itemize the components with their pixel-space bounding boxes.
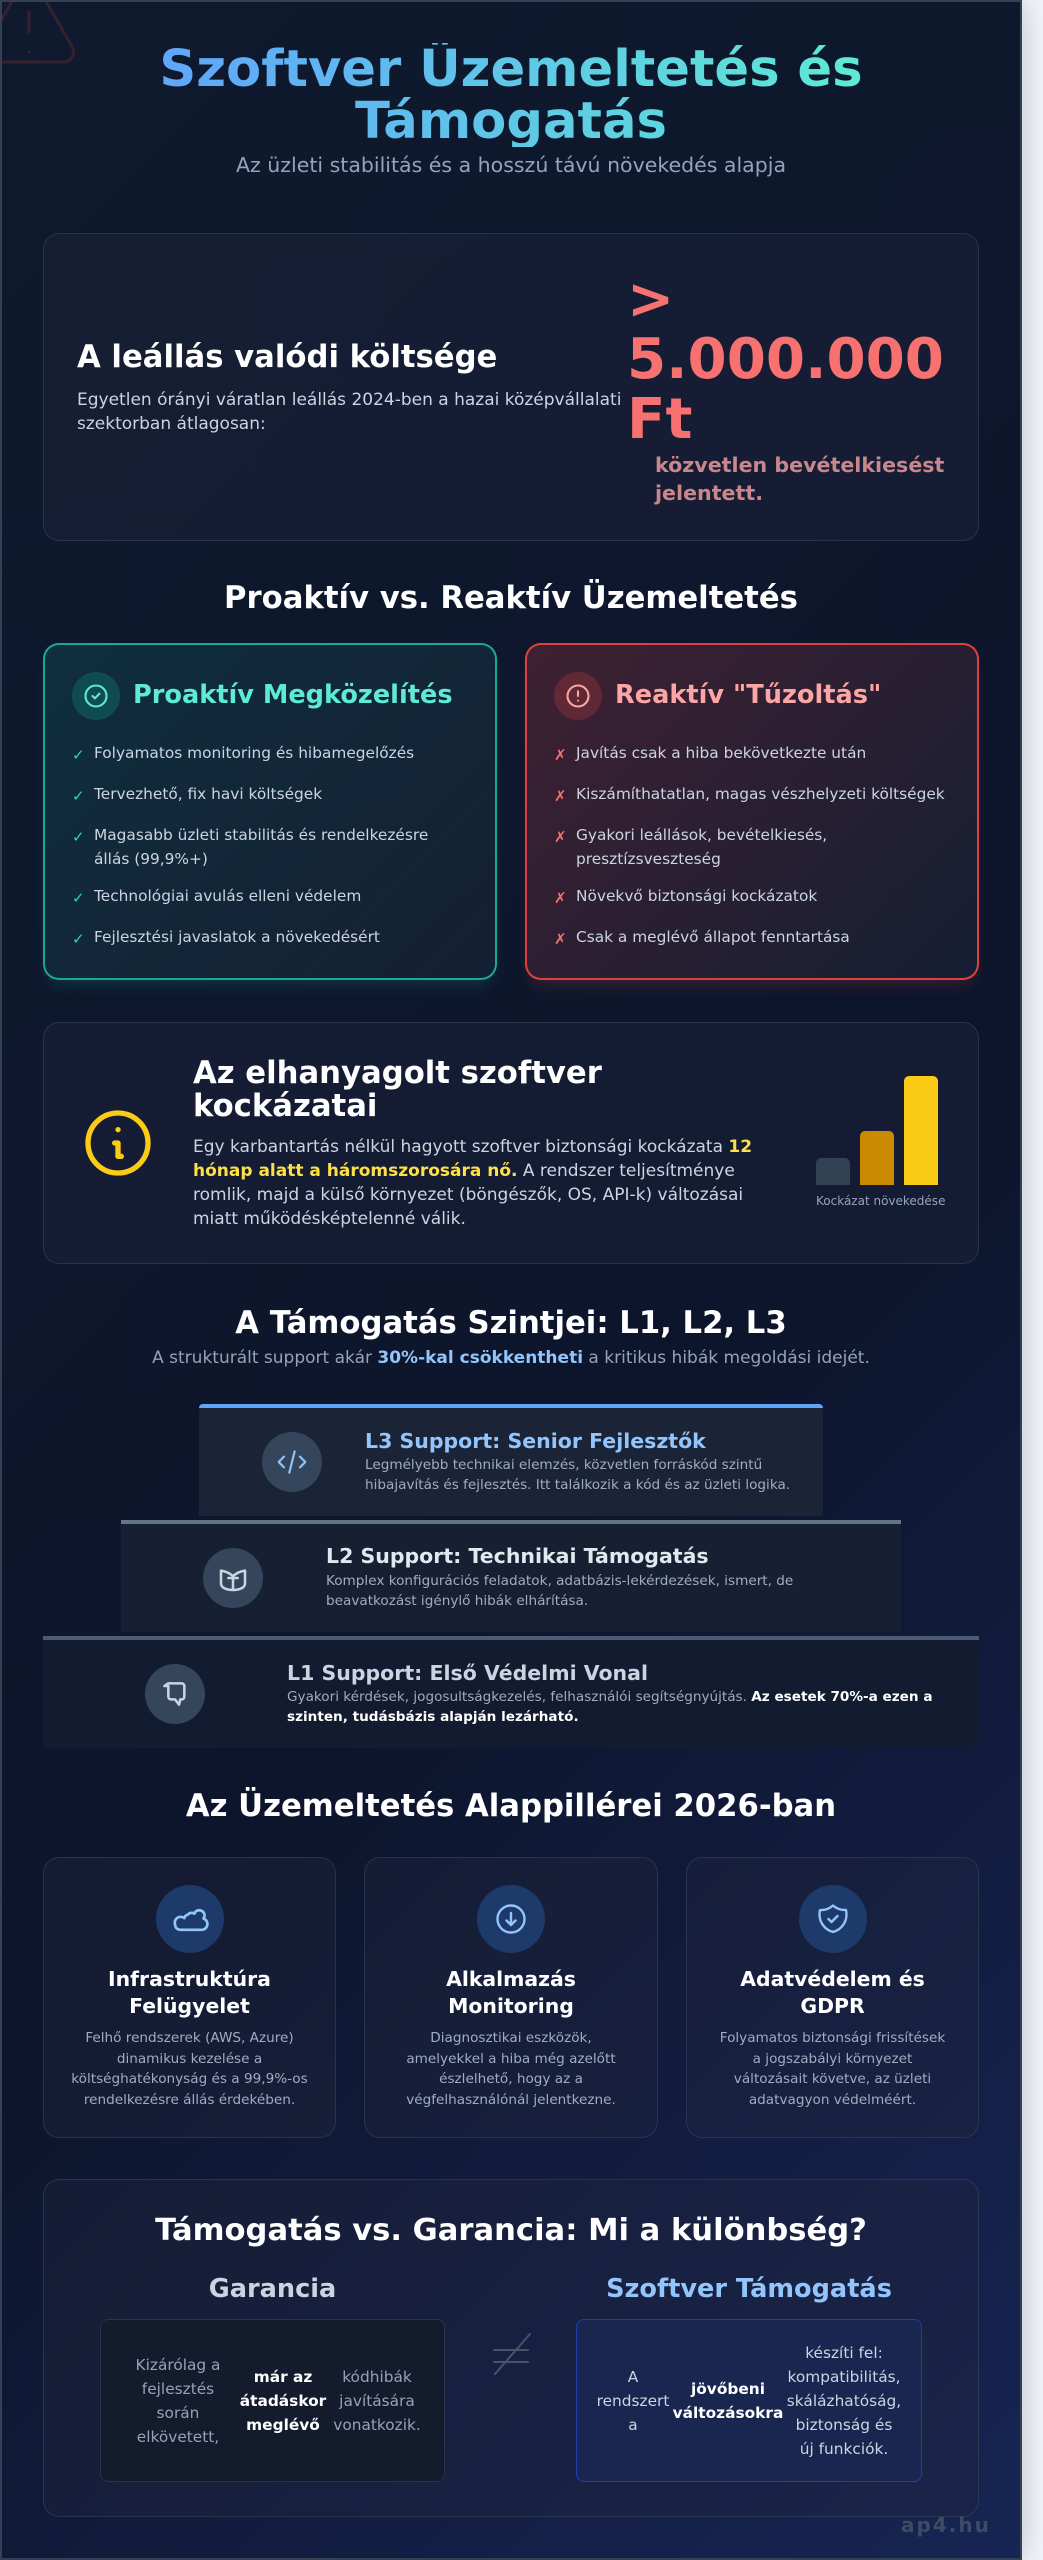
reactive list: ✗ [554,930,567,948]
icon: shield check [799,1885,867,1953]
number caption: közvetlen bevételkiesést [655,453,944,477]
support box: készíti fel: [805,2344,883,2362]
level L3 [199,1404,823,1516]
reactive list [554,744,945,948]
warranty box [100,2319,445,2482]
L2 description: beavatkozást igénylő hibák elhárítása. [326,1593,588,1609]
monitoring description: Diagnosztikai eszközök, [430,2030,592,2046]
icon: chat [145,1664,205,1724]
support box: A [628,2368,638,2386]
risk description: hónap alatt a háromszorosára nő. A rendszer teljesítménye [193,1161,735,1181]
infrastructure description: dinamikus kezelése a [117,2050,262,2066]
watermark: ap4.hu [901,2513,991,2537]
panel description: szektorban átlagosan: [77,414,266,434]
proactive list: Fejlesztési javaslatok a növekedésért [94,928,380,946]
panel description [77,390,621,434]
icon: code [262,1432,322,1492]
bar: high [904,1076,938,1185]
infrastructure description: rendelkezésre állás érdekében. [84,2092,295,2108]
icon: yellow info [85,1110,151,1176]
big number [627,267,944,452]
reactive list: Növekvő biztonsági kockázatok [576,887,817,905]
panel: reactive firefighting [525,643,979,980]
big number: Ft [627,387,692,452]
reactive list: ✗ [554,746,567,764]
chart caption: Kockázat növekedése [816,1194,945,1208]
panel: proactive approach [43,643,497,980]
data protection description: változásait követve, az üzleti [734,2071,931,2087]
proactive list: Tervezhető, fix havi költségek [94,785,322,803]
proactive list: ✓ [72,889,85,907]
section subtitle: A strukturált support akár 30%-kal csökkentheti a kritikus hibák megoldási idejét. [152,1348,870,1368]
reactive list: ✗ [554,828,567,846]
support box: a [628,2416,638,2434]
warranty box: már az [254,2368,312,2386]
panel: infrastructure pillar [43,1857,336,2138]
risk description: Egy karbantartás nélkül hagyott szoftver biztonsági kockázata 12 [193,1137,752,1157]
icon: arrow down circle [477,1885,545,1953]
proactive list: Magasabb üzleti stabilitás és rendelkezésre [94,826,428,844]
proactive list: Technológiai avulás elleni védelem [94,887,361,905]
reactive list: Kiszámíthatatlan, magas vészhelyzeti költségek [576,785,945,803]
monitoring heading [446,1967,576,2018]
proactive list: Folyamatos monitoring és hibamegelőzés [94,744,414,762]
L2 description [326,1573,793,1609]
reactive list: presztízsveszteség [576,850,721,868]
monitoring description: észlelhető, hogy az a [439,2071,583,2087]
L2 description: Komplex konfigurációs feladatok, adatbázis-lekérdezések, ismert, de [326,1573,793,1589]
data protection heading: GDPR [800,1994,865,2018]
support box: kompatibilitás, [787,2368,901,2386]
infrastructure description [71,2030,308,2108]
panel: application monitoring pillar [364,1857,658,2138]
section heading: pillars: Az Üzemeltetés Alappillérei 2026-ban [186,1789,836,1824]
panel: risks of neglected software [43,1022,979,1264]
big number: 5.000.000 [627,327,944,392]
infrastructure description: Felhő rendszerek (AWS, Azure) [85,2030,294,2046]
proactive list: ✓ [72,930,85,948]
level L2 [121,1520,901,1632]
icon: exclamation circle [554,672,602,720]
L3 description: hibajavítás és fejlesztés. Itt találkozik a kód és az üzleti logika. [365,1477,790,1493]
support box: jövőbeni [691,2380,765,2398]
infrastructure heading: Infrastruktúra [108,1967,271,1991]
panel: data protection pillar [686,1857,979,2138]
reactive heading: Reaktív "Tűzoltás" [615,680,881,710]
icon: cloud [156,1885,224,1953]
warranty box: vonatkozik. [333,2416,421,2434]
title: Támogatás [355,91,667,151]
title [157,43,865,147]
infrastructure heading: Felügyelet [129,1994,250,2018]
L3 description [365,1457,790,1493]
L1 description: szinten, tudásbázis alapján lezárható. [287,1709,579,1725]
warranty box: Kizárólag a [136,2356,220,2374]
proactive heading: Proaktív Megközelítés [133,680,453,710]
panel: support vs warranty [43,2179,979,2517]
number caption [654,453,944,505]
warranty box: meglévő [246,2416,320,2434]
monitoring description: amelyekkel a hiba még azelőtt [406,2050,616,2066]
risk description: miatt működésképtelenné válik. [193,1209,466,1229]
support box [576,2319,922,2482]
warranty box: során [157,2404,199,2422]
bar: low [816,1158,850,1185]
data protection description: adatvagyon védelméért. [749,2092,916,2108]
support heading: Szoftver Támogatás [606,2274,892,2304]
monitoring description [406,2030,616,2108]
reactive list: ✗ [554,889,567,907]
infrastructure heading [108,1967,271,2018]
monitoring heading: Monitoring [448,1994,574,2018]
support box: skálázhatóság, [787,2392,901,2410]
risk description [193,1137,752,1229]
data protection description: Folyamatos biztonsági frissítések [720,2030,945,2046]
support box: rendszert [597,2392,669,2410]
reactive list: Csak a meglévő állapot fenntartása [576,928,850,946]
reactive list: Javítás csak a hiba bekövetkezte után [576,744,866,762]
bar: medium [860,1131,894,1185]
data protection description [720,2030,946,2108]
warranty box: elkövetett, [137,2428,219,2446]
subtitle: Az üzleti stabilitás és a hosszú távú növekedés alapja [236,153,786,177]
icon: check circle [72,672,120,720]
support box: biztonság és [796,2416,892,2434]
proactive list: állás (99,9%+) [94,850,208,868]
risk heading: kockázatai [193,1089,377,1124]
monitoring description: végfelhasználónál jelentkezne. [406,2092,616,2108]
warranty box: javítására [339,2392,415,2410]
data protection description: a jogszabályi környezet [753,2050,912,2066]
risk heading: Az elhanyagolt szoftver [193,1056,602,1091]
support box: változásokra [673,2404,783,2422]
L2 heading: L2 Support: Technikai Támogatás [326,1544,709,1568]
L1 heading: L1 Support: Első Védelmi Vonal [287,1661,648,1685]
infrastructure description: költséghatékonyság és a 99,9%-os [71,2071,308,2087]
proactive list [72,744,428,948]
reactive list: Gyakori leállások, bevételkiesés, [576,826,827,844]
warranty box: kódhibák [342,2368,412,2386]
monitoring heading: Alkalmazás [446,1967,576,1991]
L3 description: Legmélyebb technikai elemzés, közvetlen forráskód szintű [365,1457,762,1473]
proactive list: ✓ [72,787,85,805]
warranty box: átadáskor [240,2392,326,2410]
L1 description [287,1689,932,1725]
proactive list: ✓ [72,828,85,846]
icon: book [203,1548,263,1608]
reactive list: ✗ [554,787,567,805]
warranty box: fejlesztés [142,2380,214,2398]
panel description: Egyetlen órányi váratlan leállás 2024-ben a hazai középvállalati [77,390,621,410]
decorative warning triangle icon [2,2,76,64]
risk description: romlik, majd a külső környezet (böngészők, OS, API-k) változásai [193,1185,743,1205]
big number: > [627,267,674,332]
L1 description: Gyakori kérdések, jogosultságkezelés, felhasználói segítségnyújtás. Az esetek 70%-a ezen a [287,1689,932,1705]
L3 heading: L3 Support: Senior Fejlesztők [365,1429,706,1453]
risk heading [193,1056,602,1124]
panel heading: A leállás valódi költsége [77,340,497,375]
panel: cost of downtime [43,233,979,541]
number caption: jelentett. [655,481,763,505]
comparison heading: Támogatás vs. Garancia: Mi a különbség? [155,2213,867,2248]
level L1 [43,1636,979,1748]
data protection heading [740,1967,925,2018]
data protection heading: Adatvédelem és [740,1967,925,1991]
support box: új funkciók. [800,2440,888,2458]
proactive list: ✓ [72,746,85,764]
chart: risk growth bars [816,1076,945,1208]
section heading: proactive vs reactive: Proaktív vs. Reaktív Üzemeltetés [224,581,798,616]
icon: not-equal sign [493,2333,531,2375]
section heading: support levels: A Támogatás Szintjei: L1, L2, L3 [235,1306,787,1341]
title: Szoftver Üzemeltetés és [159,39,863,99]
warranty heading: Garancia [209,2274,336,2304]
